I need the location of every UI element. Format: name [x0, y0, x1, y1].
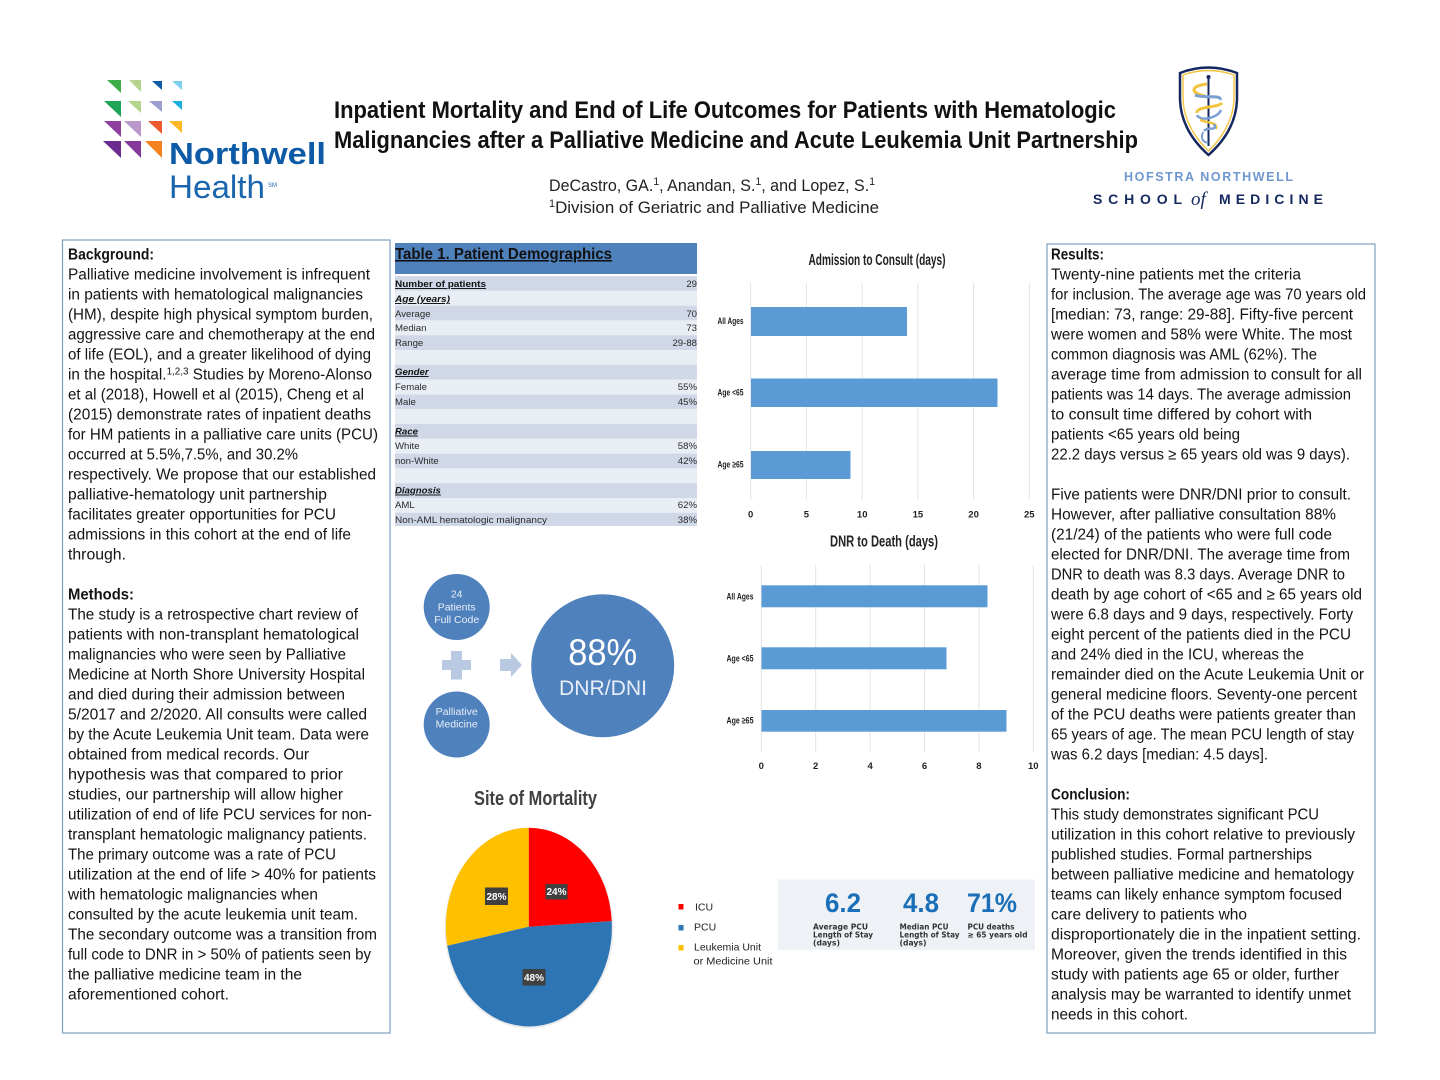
diagram: full code plus palliative medicine gives 88% DNR/DNI	[424, 574, 674, 758]
label: 48%	[522, 969, 546, 986]
legend: site of mortality: PCU	[694, 922, 716, 934]
circle: 88% DNR/DNI: 88%	[568, 632, 637, 673]
logo: Hofstra Northwell School of Medicine: SCHOOL	[1093, 191, 1182, 207]
chart: DNR to death: All Ages	[726, 592, 754, 602]
circle: palliative medicine	[424, 692, 490, 758]
text block: methods: studies, our partnership will allow higher	[68, 786, 343, 804]
text block: results: Five patients were DNR/DNI prior to consult.	[1051, 486, 1351, 504]
logo: Hofstra Northwell School of Medicine: MEDICINE	[1219, 191, 1323, 207]
text block: methods: The study is a retrospective chart review of	[68, 606, 359, 624]
text block: results: (21/24) of the patients who were full code	[1051, 526, 1332, 544]
label: 28%	[485, 888, 508, 905]
circle: palliative medicine: Medicine	[436, 718, 478, 730]
text block: results: elected for DNR/DNI. The average time from	[1051, 546, 1350, 564]
text block: results: death by age cohort of <65 and ≥ 65 years old	[1051, 586, 1362, 604]
text block: methods: obtained from medical records. Our	[68, 746, 309, 764]
bar: all ages 8.3	[762, 585, 988, 607]
text block: results: 22.2 days versus ≥ 65 years old was 9 days).	[1051, 446, 1350, 464]
text block: results: of the PCU deaths were patients greater than	[1051, 706, 1356, 724]
table: patient demographics: 62%	[678, 500, 697, 511]
table: patient demographics: 42%	[678, 456, 697, 467]
table: patient demographics: White	[395, 441, 420, 452]
text block: results: for inclusion. The average age was 70 years old	[1051, 286, 1366, 304]
chart: DNR to death	[726, 534, 1039, 772]
text block: methods: 5/2017 and 2/2020. All consults were called	[68, 706, 367, 724]
bar: age 65 and over 9	[751, 451, 850, 479]
table: patient demographics: 58%	[678, 441, 697, 452]
text block: conclusion: study with patients age 65 or older, further	[1051, 966, 1339, 984]
table: patient demographics: Female	[395, 382, 427, 393]
text block: methods: consulted by the acute leukemia unit team.	[68, 906, 358, 924]
circle: 24 patients full code	[424, 574, 490, 640]
label: 24%: 24%	[546, 887, 567, 898]
chart: DNR to death: 4	[867, 761, 873, 772]
text block: results: and 24% died in the ICU, whereas the	[1051, 646, 1304, 664]
chart: admission to consult: 5	[804, 510, 810, 520]
legend: site of mortality: Leukemia Unit	[694, 942, 761, 954]
chart: admission to consult: 0	[748, 510, 753, 520]
heading: background: Background:	[68, 246, 154, 264]
table: patient demographics: Non-AML hematologic malignancy	[395, 515, 547, 526]
text block: methods: full code to DNR in > 50% of patients seen by	[68, 946, 371, 964]
slice: PCU 48%	[447, 921, 612, 1026]
text block: methods: and died during their admission between	[68, 686, 345, 704]
table: patient demographics: Average	[395, 309, 431, 320]
table: patient demographics: non-White	[395, 456, 439, 467]
label: 24%	[546, 884, 568, 900]
text block: methods: malignancies who were seen by Palliative	[68, 646, 346, 664]
chart: admission to consult: Age <65	[718, 388, 744, 398]
text block: methods: by the Acute Leukemia Unit team. Data were	[68, 726, 369, 744]
stat: 71% PCU deaths over 65: PCU deaths	[968, 922, 1015, 932]
stat: 6.2 average length of stay: Average PCU	[813, 922, 868, 932]
label: 28%: 28%	[486, 892, 507, 903]
table: patient demographics: Diagnosis	[395, 486, 441, 496]
panel: PCU statistics	[778, 880, 1035, 950]
text block: background: of life (EOL), and a greater likelihood of dying	[68, 346, 371, 364]
text block: methods: utilization at the end of life > 40% for patients	[68, 866, 376, 884]
title: Malignancies after a Palliative Medicine and Acute Leukemia Unit Partnership	[334, 127, 1138, 154]
logo: Hofstra Northwell School of Medicine: HOFSTRA NORTHWELL	[1124, 170, 1293, 184]
authors and affiliation: , Anandan, S.	[659, 176, 755, 195]
logo: Hofstra Northwell School of Medicine	[1093, 68, 1323, 210]
text block: methods: Medicine at North Shore University Hospital	[68, 666, 365, 684]
text block: background: in patients with hematological malignancies	[68, 286, 363, 304]
chart: admission to consult: 25	[1024, 510, 1035, 520]
chart: admission to consult: 20	[968, 510, 979, 520]
icon: shield with staff and serpent	[1180, 68, 1237, 155]
bar: age under 65 22.2	[751, 378, 998, 407]
text block: background: admissions in this cohort at the end of life	[68, 526, 351, 544]
logo: Northwell Health: Health	[169, 169, 265, 205]
text block: results	[1050, 266, 1366, 764]
text block: results: to consult time differed by cohort with	[1051, 406, 1312, 424]
chart title: Admission to Consult (days)	[808, 252, 946, 269]
text block: results: eight percent of the patients died in the PCU	[1051, 626, 1351, 644]
stat: 4.8 median length of stay: 4.8	[903, 888, 939, 918]
authors and affiliation	[549, 176, 879, 217]
text block: methods: utilization of end of life PCU services for non-	[68, 806, 372, 824]
table: patient demographics	[394, 243, 697, 526]
chart: DNR to death: 6	[922, 761, 927, 772]
logo: Hofstra Northwell School of Medicine: of	[1191, 189, 1208, 210]
title	[334, 97, 1138, 154]
stat: 4.8 median length of stay	[900, 888, 960, 948]
text block: results: average time from admission to consult for all	[1051, 366, 1362, 384]
text block: background: palliative-hematology unit partnership	[68, 486, 327, 504]
authors and affiliation: 1	[549, 198, 555, 210]
chart: admission to consult	[718, 252, 1035, 520]
stat: 71% PCU deaths over 65: ≥ 65 years old	[968, 930, 1028, 940]
title: Inpatient Mortality and End of Life Outcomes for Patients with Hematologic	[334, 97, 1116, 124]
circle: 24 patients full code: Full Code	[434, 614, 479, 626]
table: patient demographics: AML	[395, 500, 415, 511]
chart: admission to consult: Age ≥65	[718, 460, 744, 470]
text block: background	[68, 266, 378, 564]
text block: results: was 6.2 days [median: 4.5 days].	[1050, 746, 1268, 764]
stat: 71% PCU deaths over 65: 71%	[967, 888, 1017, 918]
circle: 88% DNR/DNI: DNR/DNI	[559, 677, 647, 700]
legend: site of mortality	[678, 902, 773, 968]
text block: background: for HM patients in a palliative care units (PCU)	[68, 426, 378, 444]
text block: results: general medicine floors. Seventy-one percent	[1051, 686, 1358, 704]
stat: 6.2 average length of stay: (days)	[813, 938, 840, 948]
bar: all ages 14	[751, 307, 907, 336]
text block: results: DNR to death was 8.3 days. Average DNR to	[1051, 566, 1345, 584]
text block: results: patients <65 years old being	[1051, 426, 1240, 444]
text block: results: were women and 58% were White. The most	[1050, 326, 1353, 344]
text block: background: through.	[68, 546, 126, 564]
text block: background: respectively. We propose that our established	[68, 466, 376, 484]
table: patient demographics: 29-88	[672, 338, 697, 349]
text block: methods	[67, 606, 377, 1004]
text block: results: 65 years of age. The mean PCU length of stay	[1051, 726, 1354, 744]
text block: conclusion: disproportionately die in the inpatient setting.	[1051, 926, 1361, 944]
authors and affiliation: , and Lopez, S.	[761, 176, 869, 195]
authors and affiliation: 1	[755, 176, 761, 188]
text block: conclusion	[1051, 806, 1361, 1024]
circle: 24 patients full code: 24	[451, 588, 463, 600]
text block: methods: transplant hematologic malignancy patients.	[68, 826, 367, 844]
table: patient demographics: 55%	[678, 382, 697, 393]
chart: DNR to death: 10	[1028, 761, 1039, 772]
chart: DNR to death: 2	[813, 761, 818, 772]
table: patient demographics: Age (years)	[394, 294, 450, 305]
logo: Northwell Health	[103, 80, 326, 205]
chart: site of mortality pie	[444, 788, 614, 1028]
logo: Northwell Health: SM	[268, 183, 277, 189]
text block: results: [median: 73, range: 29-88]. Fifty-five percent	[1051, 306, 1354, 324]
chart: admission to consult: 15	[913, 510, 924, 520]
icon: plus	[442, 651, 471, 680]
text block: results: However, after palliative consultation 88%	[1051, 506, 1336, 524]
chart title: Site of Mortality	[474, 788, 598, 810]
circle: palliative medicine: Palliative	[436, 706, 478, 718]
text block: background: (2015) demonstrate rates of inpatient deaths	[68, 406, 371, 424]
text block: conclusion: This study demonstrates significant PCU	[1051, 806, 1319, 824]
text block: background: in the hospital.	[68, 366, 168, 384]
text block: conclusion: teams can likely enhance symptom focused	[1051, 886, 1342, 904]
text block: results: Twenty-nine patients met the criteria	[1051, 266, 1301, 284]
bar: age under 65 6.8	[762, 647, 946, 669]
text block: background: Studies by Moreno-Alonso	[189, 366, 372, 384]
text block: background: facilitates greater opportunities for PCU	[68, 506, 336, 524]
text block: conclusion: Moreover, given the trends identified in this	[1051, 946, 1347, 964]
text block: background: occurred at 5.5%,7.5%, and 30.2%	[68, 446, 298, 464]
text block: methods: hypothesis was that compared to prior	[68, 766, 343, 784]
text block: background: aggressive care and chemotherapy at the end	[68, 326, 375, 344]
bar: age 65 and over 9	[762, 710, 1006, 732]
table: patient demographics: 45%	[678, 397, 697, 408]
stat: 6.2 average length of stay: Length of Stay	[813, 930, 874, 940]
circle: 24 patients full code: Patients	[438, 602, 476, 614]
chart: DNR to death: Age ≥65	[726, 716, 754, 726]
heading: conclusion: Conclusion:	[1051, 786, 1130, 804]
text block: background: Palliative medicine involvement is infrequent	[68, 266, 371, 284]
stat: 4.8 median length of stay: (days)	[900, 938, 926, 948]
chart: admission to consult: All Ages	[718, 316, 744, 327]
text block: background: (HM), despite high physical symptom burden,	[68, 306, 373, 324]
table: patient demographics: Gender	[395, 367, 430, 378]
chart: DNR to death: 0	[759, 761, 764, 772]
table header	[395, 243, 697, 274]
text block: methods: The secondary outcome was a transition from	[68, 926, 377, 944]
text block: conclusion: needs in this cohort.	[1051, 1006, 1188, 1024]
table: patient demographics: Median	[395, 323, 426, 334]
label: 48%: 48%	[524, 973, 544, 984]
stat: 4.8 median length of stay: Median PCU	[900, 922, 948, 932]
text block: results: common diagnosis was AML (62%). The	[1051, 346, 1317, 364]
arrow	[500, 653, 522, 677]
table: patient demographics: 29	[686, 279, 697, 290]
stat: 71% PCU deaths over 65	[967, 888, 1028, 940]
text block: conclusion: utilization in this cohort relative to previously	[1051, 826, 1355, 844]
legend: site of mortality: or Medicine Unit	[694, 956, 773, 968]
authors and affiliation: 1	[653, 176, 659, 188]
panel: background and methods	[62, 240, 390, 1033]
chart title: DNR to Death (days)	[830, 534, 938, 550]
text block: methods: the palliative medicine team in the	[68, 966, 302, 984]
text block: methods: The primary outcome was a rate of PCU	[68, 846, 336, 864]
text block: conclusion: analysis may be warranted to identify unmet	[1051, 986, 1352, 1004]
table: patient demographics: 38%	[678, 515, 697, 526]
table header: Table 1. Patient Demographics	[395, 246, 612, 263]
logo: Northwell Health: Northwell	[169, 136, 326, 171]
slice: ICU 24%	[529, 828, 612, 927]
table: patient demographics: 73	[686, 323, 697, 334]
heading: results: Results:	[1051, 246, 1104, 264]
panel: results and conclusion	[1047, 244, 1375, 1033]
stat: 6.2 average length of stay: 6.2	[825, 888, 861, 918]
heading: methods: Methods:	[68, 586, 134, 604]
slice: leukemia or medicine unit 28%	[446, 828, 529, 946]
text block: background: et al (2018), Howell et al (2015), Cheng et al	[68, 386, 364, 404]
legend: site of mortality: ICU	[695, 902, 713, 914]
text block: background: 1,2,3	[167, 366, 189, 378]
text block: conclusion: published studies. Formal partnerships	[1051, 846, 1312, 864]
authors and affiliation: DeCastro, GA.	[549, 176, 660, 195]
text block: results: remainder died on the Acute Leukemia Unit or	[1051, 666, 1364, 684]
table: patient demographics: Male	[395, 397, 416, 408]
text block: results: were 6.8 days and 9 days, respectively. Forty	[1050, 606, 1353, 624]
text block: methods: with hematologic malignancies when	[67, 886, 318, 904]
table: patient demographics: 70	[686, 309, 697, 320]
stat: 4.8 median length of stay: Length of Stay	[900, 930, 960, 940]
table: patient demographics: Number of patients	[395, 279, 486, 290]
table: patient demographics: Range	[395, 338, 423, 349]
table: patient demographics: Race	[395, 426, 419, 438]
text block: conclusion: between palliative medicine and hematology	[1051, 866, 1354, 884]
text block: methods: patients with non-transplant hematological	[68, 626, 359, 644]
chart: admission to consult: 10	[857, 510, 867, 520]
circle: 88% DNR/DNI	[531, 594, 674, 737]
text block: conclusion: care delivery to patients who	[1051, 906, 1247, 924]
chart: DNR to death: 8	[976, 761, 982, 772]
stat: 6.2 average length of stay	[813, 888, 874, 948]
authors and affiliation: Division of Geriatric and Palliative Medicine	[555, 198, 879, 217]
authors and affiliation: 1	[869, 176, 875, 188]
text block: methods: aforementioned cohort.	[68, 986, 229, 1004]
chart: DNR to death: Age <65	[726, 654, 754, 664]
text block: results: patients was 14 days. The average admission	[1051, 386, 1351, 404]
